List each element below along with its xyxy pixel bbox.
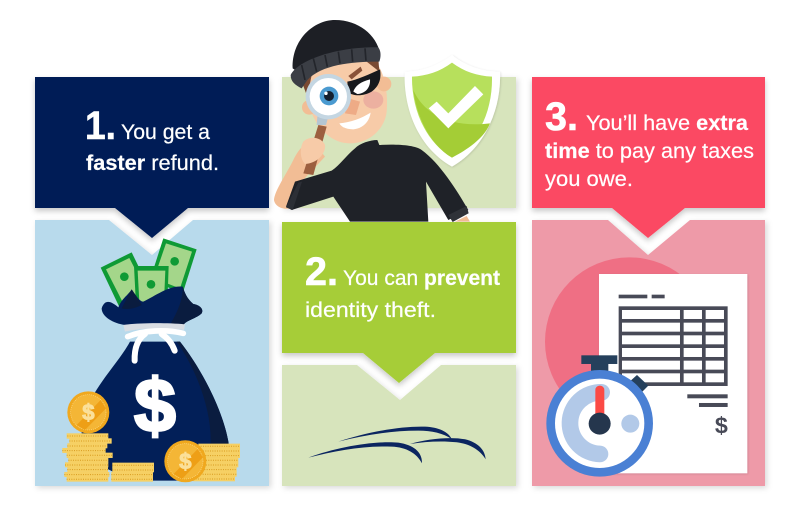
magnifying glass	[303, 74, 351, 175]
tax form	[599, 274, 747, 473]
text: number 3: 3.	[545, 95, 578, 139]
text: identity theft: identity theft.	[305, 299, 436, 322]
icon: gold coin upper: $	[82, 400, 94, 425]
thief arm skin	[274, 142, 325, 209]
panel: callout 3 red	[532, 77, 765, 238]
icon: gold coin lower: $	[179, 449, 191, 474]
thief hand	[301, 138, 325, 164]
icon: dollar sign: $	[134, 364, 176, 448]
text: you get a: You get a	[121, 121, 210, 144]
icon: gold coin lower	[164, 440, 206, 482]
icon: security shield	[405, 55, 500, 167]
thief body	[286, 140, 470, 222]
icon: banknotes	[101, 238, 197, 308]
panel: callout 1 navy	[35, 77, 269, 238]
panel: identity illustration background upper	[282, 77, 516, 208]
icon: gold coin upper	[67, 391, 109, 433]
background circle	[545, 257, 714, 426]
panel: refund illustration background	[35, 220, 269, 486]
tax form: $	[715, 412, 728, 438]
stopwatch	[546, 355, 653, 477]
thief beanie	[291, 20, 381, 88]
text: time to pay any taxes: time to pay any taxes	[545, 140, 754, 163]
icon: tax document and stopwatch	[545, 257, 747, 477]
text: you can prevent: You can prevent	[343, 267, 500, 290]
icon: bag body	[81, 286, 229, 481]
icon: coin stacks	[62, 433, 240, 482]
panel: callout 2 green	[282, 222, 516, 383]
text: number 1: 1.	[85, 104, 116, 148]
icon: thief with magnifying glass	[274, 20, 470, 222]
panel: tax illustration background	[532, 220, 765, 486]
text: number 2: 2.	[305, 250, 338, 294]
thief head	[302, 57, 391, 143]
text: you owe: you owe.	[545, 168, 633, 191]
icon: swoosh logo	[308, 427, 486, 463]
text: you will have extra: You’ll have extra	[586, 112, 748, 135]
text: faster refund: faster refund.	[86, 152, 219, 175]
icon: money bag with coins	[62, 238, 240, 482]
panel: identity illustration background lower	[282, 365, 516, 486]
